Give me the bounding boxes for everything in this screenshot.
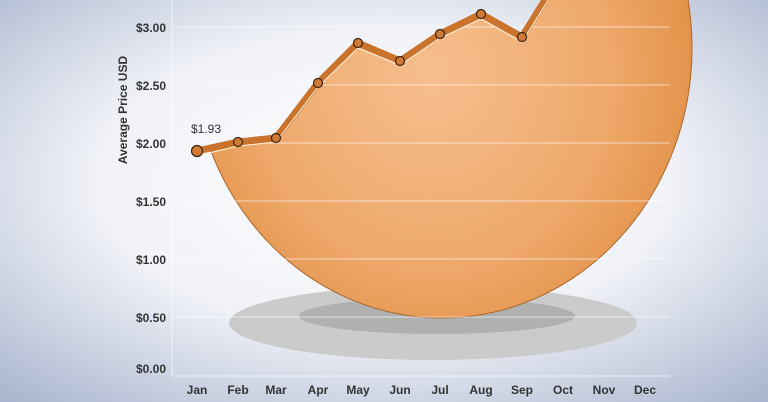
- y-axis labels: $2.50: [136, 79, 166, 93]
- y-axis labels: $0.50: [136, 311, 166, 325]
- y-axis labels: $3.00: [136, 21, 166, 35]
- x-axis labels: Nov: [593, 383, 616, 397]
- x-axis labels: Feb: [227, 383, 249, 397]
- gridlines: [172, 0, 670, 376]
- y-axis labels: $2.00: [136, 137, 166, 151]
- y-axis labels: $1.50: [136, 195, 166, 209]
- shadow ellipses: [229, 286, 637, 360]
- x-axis labels: Jun: [389, 383, 411, 397]
- y-axis labels: $0.00: [136, 362, 166, 376]
- x-axis labels: Jan: [187, 383, 207, 397]
- x-axis labels: [187, 383, 656, 397]
- egg area: [192, 0, 692, 318]
- x-axis labels: Sep: [511, 383, 533, 397]
- y-axis labels: [136, 21, 166, 376]
- x-axis labels: Aug: [469, 383, 493, 397]
- y-axis labels: $1.00: [136, 253, 166, 267]
- x-axis labels: Dec: [634, 383, 656, 397]
- y-axis title: Average Price USD: [116, 56, 130, 164]
- x-axis labels: Jul: [431, 383, 449, 397]
- x-axis labels: Mar: [265, 383, 287, 397]
- x-axis labels: May: [346, 383, 370, 397]
- x-axis labels: Apr: [308, 383, 329, 397]
- x-axis labels: Oct: [553, 383, 573, 397]
- data label: $1.93: [191, 122, 221, 136]
- price line: [192, 0, 570, 156]
